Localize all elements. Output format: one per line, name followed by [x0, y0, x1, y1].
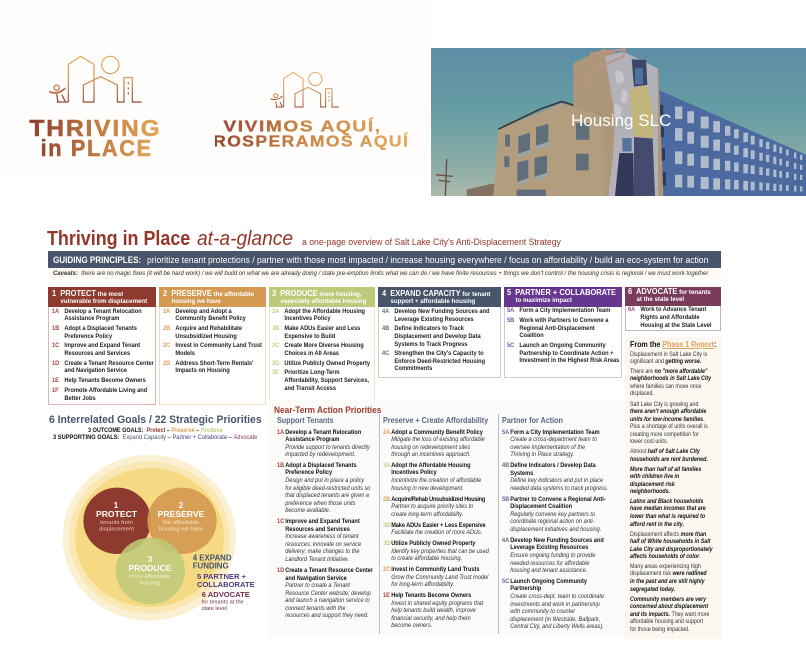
label: expand funding: 4 EXPAND — [193, 554, 232, 562]
goals heading: 6 Interrelated Goals / 22 Strategic Priorities — [49, 414, 262, 426]
panel: 2 preserve — [159, 287, 266, 405]
header: advocate: 6 ADVOCATE for tenants at the state level — [628, 286, 711, 303]
item 5A: Form a City Implementation Team — [519, 307, 610, 314]
item 2A: Develop and Adopt a Community Benefit Policy — [175, 308, 246, 322]
outer goal rings — [63, 455, 236, 621]
item 3B: Make ADUs Easier and Less Expensive to Build — [285, 325, 361, 340]
item 1B: 1B — [52, 325, 59, 332]
header: produce: 3 PRODUCE more housing, especially affordable housing — [272, 288, 367, 305]
action 1B: Adopt a Displaced Tenants Preference Policy Design and put in place a policy for eligible deed-restricted units so that displaced tenants are given a preference when those units become available. — [285, 462, 370, 514]
item 4A: Develop New Funding Sources and Leverage Existing Resources — [394, 308, 489, 323]
panel: 3 produce — [269, 287, 375, 405]
action 1C: 1C — [277, 518, 284, 525]
circle: protect: 1 — [114, 501, 119, 510]
action 5A: Form a City Implementation Team Create a cross-department team to oversee implementation of the Thriving in Place strategy. — [511, 428, 600, 458]
caveats band: Caveats: there are no magic fixes (it will be hard work) / we will build on what we are already doing / state pre-emption limits what we can do / we have finite resources + things we don't control / the housing crisis is regional / we must work together — [52, 270, 708, 276]
action 3A: Adopt the Affordable Housing Incentives Policy Incentivize the creation of affordable housing in new development. — [391, 462, 481, 492]
action 1B: 1B — [277, 462, 284, 469]
item 3C: 3C — [272, 342, 280, 349]
circle: produce: PRODUCE — [129, 563, 172, 573]
item 1C: 1C — [52, 342, 59, 349]
label: advocate: 6 ADVOCATE — [202, 590, 250, 599]
venn diagram — [62, 454, 255, 621]
item 1E: Help Tenants Become Owners — [64, 377, 146, 384]
action 2A: 2A — [383, 428, 390, 436]
finding: not enough units: Salt Lake City is growing and there aren't enough affordable units for low-income families. Plus a shortage of units overall is creating more competition for lower cost units. — [630, 400, 708, 445]
column: partner for action — [502, 412, 622, 634]
item 2B: 2B — [163, 325, 170, 332]
panel: 4 expand capacity — [378, 287, 501, 378]
action 1A: 1A — [277, 428, 284, 436]
item 4C: Strengthen the City's Capacity to Enforce Deed-Restricted Housing Commitments — [394, 350, 485, 372]
panel: 1 protect — [48, 287, 156, 405]
divider — [498, 414, 499, 634]
item 1F: 1F — [52, 387, 59, 394]
label: partner + collaborate: 5 PARTNER + — [197, 572, 247, 581]
finding: no more affordable neighborhoods: There are no "more affordable" neighborhoods in Salt Lake City where families can move once displaced. — [630, 368, 711, 397]
subtitle: a one-page overview of Salt Lake City's Anti-Displacement Strategy — [302, 236, 560, 246]
item 5B: 5B — [507, 317, 514, 324]
item 3E: Prioritize Long-Term Affordability, Support Services, and Transit Access — [285, 369, 369, 392]
finding: median incomes: Latinx and Black households have median incomes that are lower than what is required to afford rent in the city. — [630, 498, 706, 528]
action 5B: 5B — [502, 496, 509, 502]
title: Thriving in Place — [47, 228, 190, 250]
finding: community concern: Community members are very concerned about displacement and its impacts. They want more affordable housing and support for those being impacted. — [630, 596, 710, 633]
item 2C: 2C — [163, 342, 170, 349]
item 5A: 5A — [507, 307, 514, 314]
action 3A: 3A — [383, 462, 390, 469]
item 5C: Launch an Ongoing Community Partnership to Coordinate Action + Investment in the Highest Risk Areas — [519, 342, 619, 364]
column: preserve + create affordability — [383, 412, 496, 634]
finding: children: More than half of all families with children live in displacement risk neighborhoods. — [630, 466, 701, 495]
action 1A: Develop a Tenant Relocation Assistance Program Provide support to tenants directly impacted by redevelopment. — [285, 428, 369, 458]
item 1F: Promote Affordable Living and Better Jobs — [64, 387, 147, 402]
action 1C: Improve and Expand Tenant Resources and Services Increase awareness of tenant resources; innovate on service delivery; make changes to the Landlord Tenant Initiative. — [285, 518, 361, 563]
finding: households of color: Displacement affects more than half of White households in Salt Lake City and disproportionately affects households of color. — [630, 530, 713, 560]
wordmark — [29, 115, 162, 161]
action 3B: Make ADUs Easier + Less Expensive Facilitate the creation of more ADUs. — [391, 522, 486, 536]
header: partner + collaborate: 5 PARTNER + COLLABORATE to maximize impact — [507, 287, 616, 304]
column heading: Partner for Action — [502, 415, 563, 425]
logo background — [0, 0, 430, 177]
item 4C: 4C — [382, 350, 389, 357]
item 1C: Improve and Expand Tenant Resources and Services — [64, 342, 140, 357]
item 6A: 6A — [628, 306, 635, 313]
phase 1 report heading: From the Phase 1 Report: — [630, 340, 716, 349]
finding: redlined: Many areas experiencing high displacement risk were redlined in the past and are still highly segregated today. — [630, 563, 707, 593]
header: preserve: 2 PRESERVE the affordable housing we have — [163, 288, 254, 305]
caveats band — [48, 268, 721, 279]
logo: Vivimos Aqui, Prosperamos Aqui — [215, 72, 409, 151]
action 4A: 4A — [502, 537, 509, 544]
item 2D: Address Short-Term Rentals' Impacts on Housing — [175, 360, 253, 374]
item 1A: 1A — [52, 308, 59, 315]
guiding principles banner: GUIDING PRINCIPLES: — [52, 254, 141, 264]
photo: Housing SLC building with mural — [431, 48, 806, 196]
action 2C: Invest in Community Land Trusts Grow the Community Land Trust model for long-term affordability. — [391, 566, 488, 588]
panel: near-term action priorities — [269, 400, 625, 638]
item 5C: 5C — [507, 342, 514, 349]
item 2D: 2D — [163, 360, 170, 367]
circle: preserve: 2 — [179, 501, 184, 510]
wordmark: THRIVING — [29, 115, 162, 141]
circle: protect: tenants from — [100, 520, 133, 526]
action 5B: Partner to Convene a Regional Anti- Displacement Coalition Regularly convene key partners to coordinate regional action on anti- displacement initiatives and housing. — [511, 496, 606, 533]
panel: 6 advocate — [625, 286, 721, 331]
finding: rent burdened: Almost half of Salt Lake City households are rent burdened. — [630, 448, 708, 463]
action 1E: 1E — [383, 592, 390, 599]
circle: produce — [116, 538, 185, 604]
panel: from the phase 1 report — [625, 337, 721, 639]
supporting goals line: 3 SUPPORTING GOALS: Expand Capacity – Partner + Collaborate – Advocate — [53, 434, 257, 441]
action 2B: 2B — [383, 496, 390, 502]
label: advocate: for tenants at the — [202, 600, 244, 606]
circle: produce: housing — [140, 580, 160, 586]
item 1A: Develop a Tenant Relocation Assistance Program — [64, 308, 142, 322]
action 1D: Create a Tenant Resource Center and Navigation Service Partner to create a Tenant Resource Center website; develop and launch a navigation service to connect tenants with the resources and support they need. — [285, 567, 373, 619]
action 5C: 5C — [502, 578, 509, 585]
label: advocate — [202, 590, 250, 612]
item 2A: 2A — [163, 308, 170, 315]
circle: preserve: PRESERVE — [158, 509, 205, 519]
label: partner + collaborate — [197, 572, 255, 589]
item 1E: 1E — [52, 377, 59, 384]
wordmark — [200, 117, 409, 151]
item 4B: Define Indicators to Track Displacement and Develop Data Systems to Track Progress — [394, 325, 481, 348]
item 3E: 3E — [272, 369, 279, 376]
circle: preserve — [147, 488, 217, 554]
item 3C: Create More Diverse Housing Choices in All Areas — [285, 342, 364, 357]
finding: getting worse: Displacement in Salt Lake City is significant and getting worse. — [630, 350, 707, 365]
label: expand funding: FUNDING — [193, 562, 229, 570]
near-term heading: Near-Term Action Priorities — [274, 405, 381, 415]
item 3A: Adopt the Affordable Housing Incentives Policy — [285, 308, 365, 322]
divider — [379, 414, 380, 634]
label: expand funding — [193, 554, 232, 570]
item 4A: 4A — [382, 308, 389, 315]
label: advocate: state level — [202, 606, 227, 612]
action 1E: Help Tenants Become Owners Invest in shared equity programs that help tenants build wealth, improve financial security, and help them become owners. — [391, 592, 483, 629]
item 2C: Invest in Community Land Trust Models — [175, 342, 262, 357]
action 3B: 3B — [383, 522, 390, 529]
item 2B: Acquire and Rehabilitate Unsubsidized Housing — [175, 325, 242, 340]
item 6A: Work to Advance Tenant Rights and Affordable Housing at the State Level — [640, 306, 711, 329]
logo: Thriving in Place — [29, 56, 162, 161]
icon: houses and person — [49, 56, 142, 102]
action 3D: 3D — [383, 540, 390, 547]
action 3D: Utilize Publicly Owned Property Identify key properties that can be used to create affordable housing. — [391, 540, 489, 562]
action 4B: Define Indicators / Develop Data Systems Define key indicators and put in place needed data systems to track progress. — [511, 462, 608, 492]
circle: preserve: the affordable — [163, 520, 200, 526]
wordmark: in PLACE — [41, 135, 153, 161]
item 1B: Adopt a Displaced Tenants Preference Policy — [64, 325, 137, 340]
column: support tenants — [277, 415, 373, 619]
title: at-a-glance — [197, 228, 293, 250]
guiding principles banner — [48, 251, 721, 268]
photo caption: Housing SLC — [571, 112, 671, 130]
action 2B: Acquire/Rehab Unsubsidized Housing Partner to acquire priority sites to create long-term affordability. — [391, 496, 485, 518]
header: protect: 1 PROTECT the most vulnerable from displacement — [52, 288, 147, 305]
wordmark: VIVIMOS AQUÍ, — [223, 117, 382, 136]
icon: houses and person — [270, 72, 339, 107]
circle: protect: PROTECT — [96, 509, 138, 519]
action 2A: Adopt a Community Benefit Policy Mitigate the loss of existing affordable housing on redevelopment sites through an incentives approach. — [391, 428, 485, 458]
guiding principles banner: prioritize tenant protections / partner with those most impacted / increase housing everywhere / focus on affordability / build an eco-system for action — [147, 254, 708, 264]
action 1D: 1D — [277, 567, 284, 574]
action 5A: 5A — [502, 428, 509, 436]
action 4B: 4B — [502, 462, 509, 469]
column heading: Support Tenants — [277, 415, 333, 425]
outcome goals line: 3 OUTCOME GOALS: Protect – Preserve – Produce — [88, 427, 223, 434]
action 2C: 2C — [383, 566, 390, 573]
title — [47, 228, 561, 250]
panel: 5 partner + collaborate — [504, 286, 622, 378]
circle: protect — [83, 488, 151, 554]
item 4B: 4B — [382, 325, 389, 332]
circle: produce: more affordable — [129, 574, 171, 580]
action 4A: Develop New Funding Sources and Leverage Existing Resources Ensure ongoing funding to provide needed resources for affordable housing and tenant assistance. — [511, 537, 604, 574]
circle: produce: 3 — [148, 555, 153, 564]
item 3A: 3A — [272, 308, 280, 315]
item 3B: 3B — [272, 325, 280, 332]
action 5C: Launch Ongoing Community Partnership Create cross-dept. team to coordinate investments and work in partnership with community to counter displacement (in Westside, Ballpark, Central City, and Liberty Wells areas). — [511, 578, 604, 630]
item 5B: Work with Partners to Convene a Regional Anti-Displacement Coalition — [519, 317, 608, 339]
item 1D: Create a Tenant Resource Center and Navigation Service — [64, 360, 154, 374]
item 3D: Utilize Publicly Owned Property — [285, 360, 370, 367]
circle: protect: displacement — [99, 526, 134, 532]
header: expand capacity: 4 EXPAND CAPACITY for tenant support + affordable housing — [382, 288, 490, 305]
circle: preserve: housing we have — [159, 526, 204, 532]
item 3D: 3D — [272, 360, 280, 367]
item 1D: 1D — [52, 360, 59, 367]
column heading: Preserve + Create Affordability — [383, 415, 488, 425]
label: partner + collaborate: COLLABORATE — [197, 580, 255, 589]
